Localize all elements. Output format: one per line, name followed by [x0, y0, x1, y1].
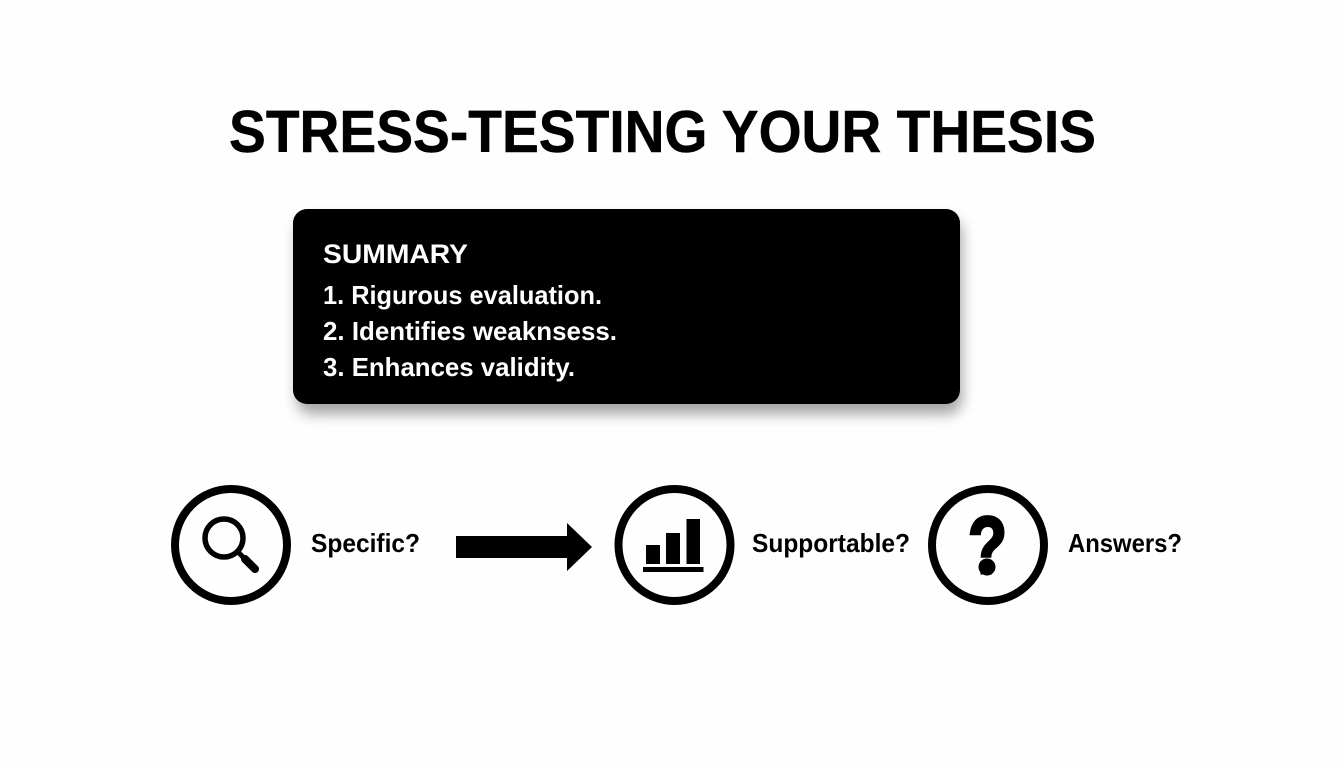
title: STRESS-TESTING YOUR THESIS: [229, 98, 1096, 165]
arrow: [456, 523, 592, 571]
icon: question mark in circle: ?: [968, 501, 1007, 591]
label: specific: Specific?: [311, 528, 420, 558]
panel: summary: [293, 209, 962, 414]
summary item 2: 2. Identifies weaknsess.: [323, 316, 617, 346]
summary heading: SUMMARY: [323, 239, 468, 269]
icon: question mark in circle: [932, 489, 1044, 601]
icon: magnifying glass in circle: [175, 489, 287, 601]
label: supportable: Supportable?: [752, 528, 910, 558]
summary box background: [293, 209, 960, 404]
icon: bar chart in circle: [618, 489, 730, 601]
summary item 1: 1. Rigurous evaluation.: [323, 280, 602, 310]
summary item 3: 3. Enhances validity.: [323, 352, 575, 382]
label: answers: Answers?: [1068, 528, 1182, 558]
